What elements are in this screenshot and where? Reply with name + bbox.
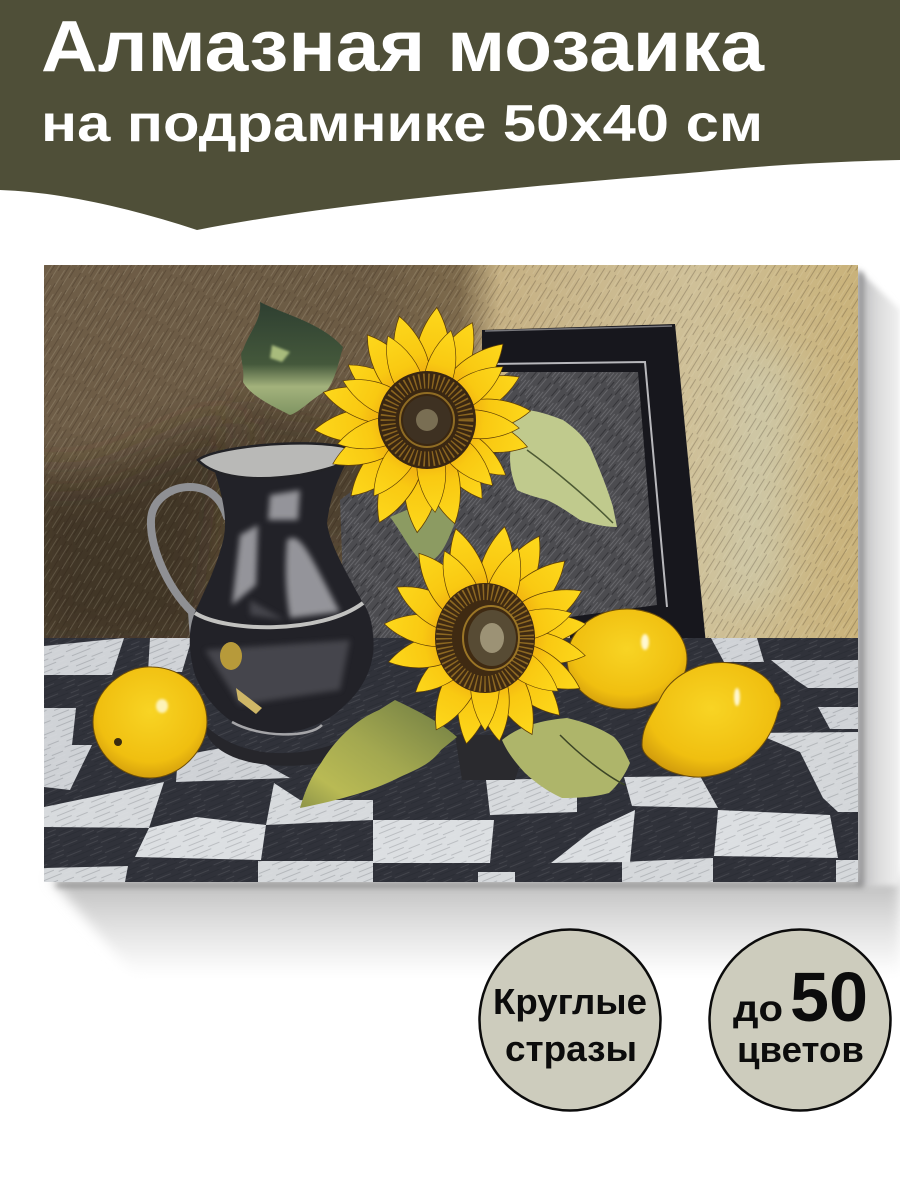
jug handle	[151, 487, 227, 640]
leaf lower left	[300, 700, 457, 808]
badge: round rhinestones: Круглые	[493, 981, 647, 1022]
back lemon highlight	[641, 634, 649, 650]
jug collar	[195, 603, 363, 627]
leaf upper left	[241, 302, 343, 415]
left lemon	[93, 667, 207, 778]
jug yellow reflections	[220, 642, 242, 670]
leaf right	[510, 410, 617, 527]
left lemon highlight	[156, 699, 168, 713]
badge: up to 50 colours	[710, 930, 890, 1110]
picture frame	[340, 324, 708, 665]
checkered tablecloth	[44, 638, 858, 882]
badge: up to 50 colours: до	[733, 988, 783, 1029]
jug foot shadow	[206, 728, 334, 766]
badge: round rhinestones: стразы	[505, 1028, 637, 1069]
front lemon	[642, 663, 781, 777]
leaf lower right	[502, 718, 630, 798]
jug belly reflections	[205, 600, 350, 705]
canvas painting	[20, 265, 858, 882]
left lemon stem mark	[114, 738, 122, 746]
jug rim	[198, 443, 360, 478]
badge: up to 50 colours: 50	[790, 958, 868, 1036]
front lemon highlight	[734, 688, 740, 706]
subtitle: на подрамнике 50х40 см	[41, 95, 763, 153]
jug	[151, 443, 374, 734]
jug base rim	[232, 722, 322, 734]
jug body	[190, 465, 374, 733]
sunflower bottom	[382, 524, 589, 747]
jug reflections	[232, 490, 340, 618]
small leaf centre	[390, 506, 460, 559]
badge: up to 50 colours: цветов	[737, 1029, 864, 1070]
sunflower top	[313, 306, 532, 534]
badge: round rhinestones	[480, 930, 660, 1110]
back lemon	[567, 609, 687, 709]
dark cast shadow under flowers	[456, 735, 520, 780]
wall background	[20, 265, 858, 660]
canvas shadow	[50, 268, 900, 975]
header banner	[0, 0, 900, 230]
jug lower reflection	[236, 688, 262, 714]
title: Алмазная мозаика	[41, 7, 765, 87]
